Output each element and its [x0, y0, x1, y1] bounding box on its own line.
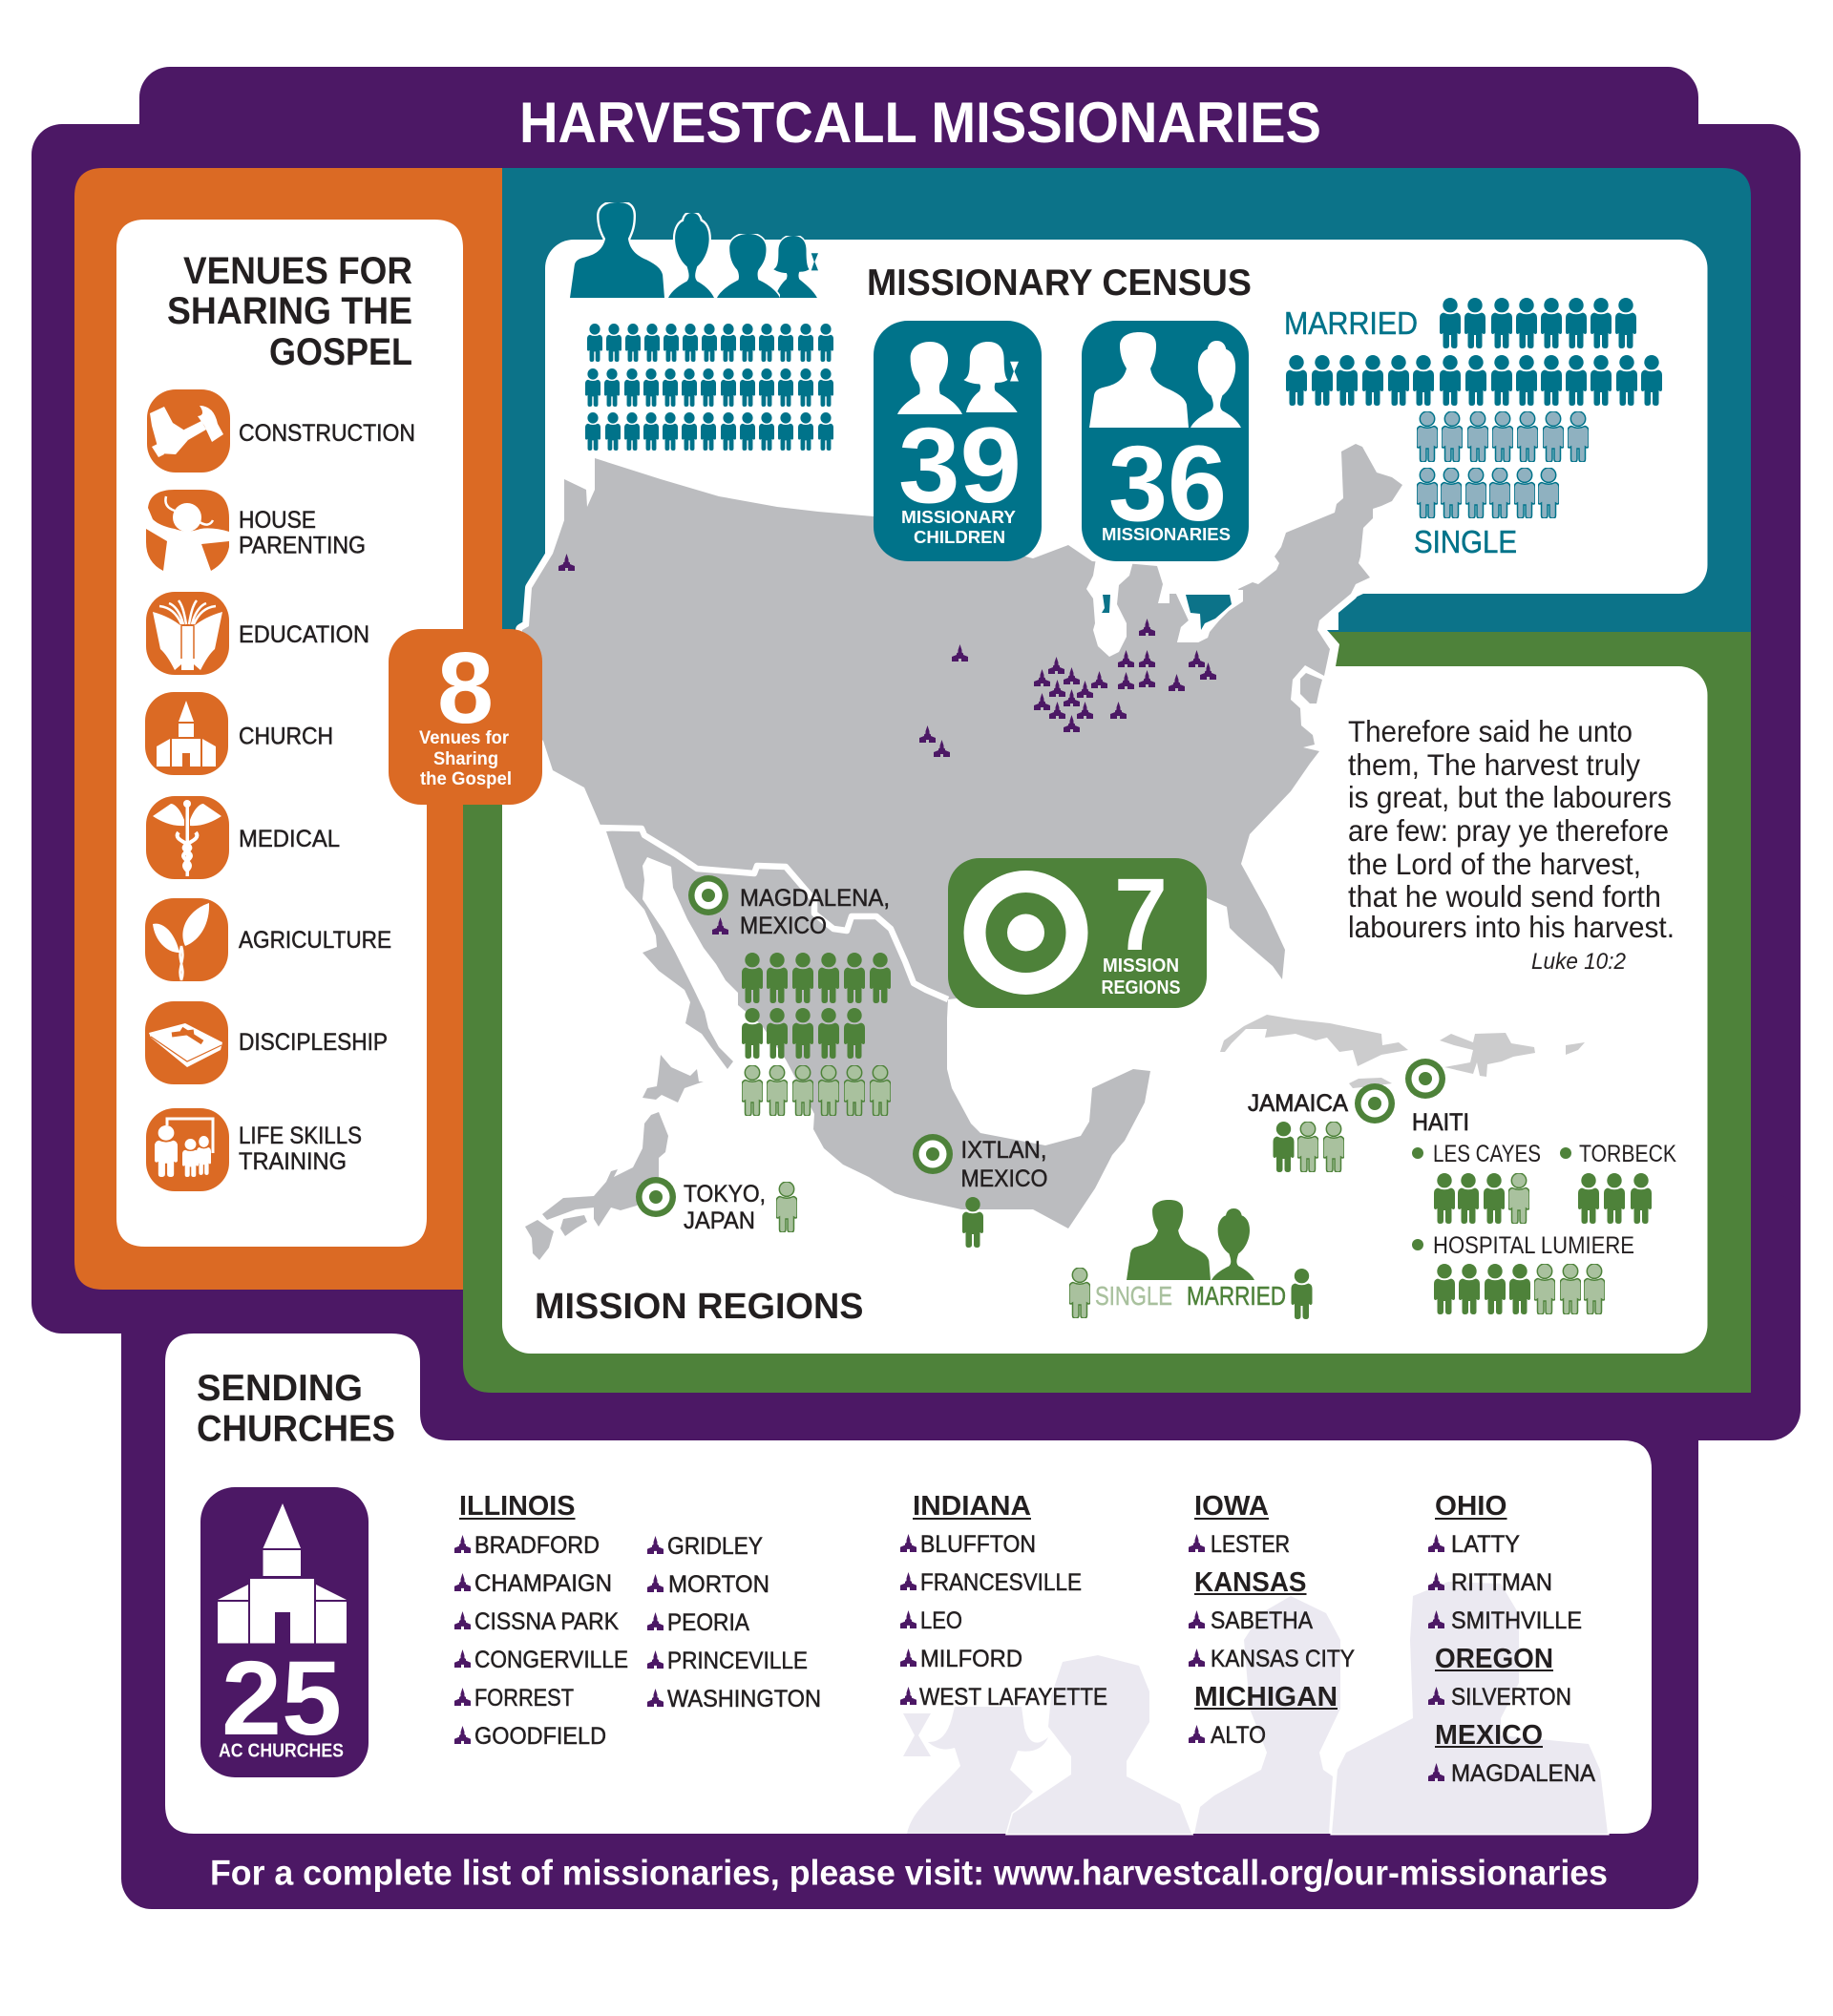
single people — [1417, 411, 1589, 518]
badge: 8 venues — [389, 629, 542, 805]
list: illinois: BRADFORD — [474, 1532, 600, 1559]
sending churches heading — [197, 1368, 395, 1449]
icon: construction — [147, 389, 230, 472]
list: illinois: GRIDLEY — [667, 1533, 763, 1560]
scripture quote: them, The harvest truly — [1348, 747, 1640, 782]
married label: MARRIED — [1284, 305, 1418, 341]
list: iowa kansas michigan: MICHIGAN — [1194, 1682, 1338, 1712]
panel: venues for sharing the gospel — [116, 220, 463, 1247]
list: illinois: FORREST — [474, 1685, 574, 1712]
list: iowa kansas michigan: KANSAS CITY — [1211, 1646, 1355, 1672]
region: ixtlan mexico: IXTLAN, — [960, 1137, 1046, 1164]
map: sending church markers — [558, 554, 1216, 757]
label: house parenting — [239, 507, 366, 559]
label: life skills training — [239, 1123, 362, 1175]
list: indiana: MILFORD — [920, 1646, 1022, 1672]
region: magdalena mexico: MEXICO — [740, 913, 827, 939]
map: lake huron shore — [1169, 590, 1243, 642]
list: iowa kansas michigan — [1189, 1491, 1355, 1749]
list: illinois: ILLINOIS — [459, 1491, 575, 1522]
region: jamaica — [1248, 1083, 1395, 1172]
scripture quote: Therefore said he unto — [1348, 714, 1633, 748]
list: ohio oregon mexico: LATTY — [1451, 1531, 1520, 1558]
badge: 8 venues: 8 — [437, 632, 494, 745]
list: illinois: WASHINGTON — [667, 1686, 821, 1712]
label: discipleship: DISCIPLESHIP — [239, 1029, 388, 1056]
badge: 8 venues: the Gospel — [420, 769, 512, 789]
census heading: MISSIONARY CENSUS — [867, 262, 1252, 304]
region: tokyo japan: JAPAN — [684, 1208, 755, 1234]
badge: 7 mission regions — [948, 856, 1207, 1008]
map: japan — [525, 1055, 704, 1260]
list: ohio oregon mexico: SILVERTON — [1451, 1684, 1571, 1711]
map: us mexico border — [597, 828, 948, 999]
badge: 36 missionaries — [1082, 321, 1249, 561]
title: HARVESTCALL MISSIONARIES — [519, 91, 1321, 155]
map: united states — [522, 444, 1402, 999]
list: indiana: INDIANA — [913, 1491, 1031, 1522]
map: lake sliver — [1102, 595, 1110, 613]
legend: single and married: MARRIED — [1187, 1281, 1286, 1311]
badge: 39 missionary children: MISSIONARY — [901, 508, 1016, 527]
region: ixtlan mexico — [913, 1134, 1048, 1248]
region: haiti — [1405, 1059, 1676, 1314]
map: lake huron — [1186, 595, 1232, 630]
label: agriculture: AGRICULTURE — [239, 927, 391, 954]
badge: 36 missionaries: MISSIONARIES — [1102, 525, 1231, 544]
region: haiti: HOSPITAL LUMIERE — [1433, 1232, 1634, 1259]
region: magdalena mexico — [688, 875, 891, 1116]
badge: 7 mission regions: 7 — [1114, 856, 1168, 972]
badge: 7 mission regions: MISSION — [1103, 956, 1179, 976]
scripture quote: is great, but the labourers — [1348, 780, 1672, 814]
list: illinois — [454, 1491, 821, 1750]
panel: missionary census — [570, 202, 1662, 561]
icon: house parenting — [146, 490, 229, 571]
people count: children — [585, 324, 833, 451]
badge: 25 ac churches: 25 — [221, 1640, 342, 1757]
mission regions heading: MISSION REGIONS — [535, 1287, 863, 1327]
badge: 36 missionaries: 36 — [1108, 424, 1227, 543]
list: illinois: PEORIA — [667, 1609, 749, 1636]
list: illinois: GOODFIELD — [474, 1723, 606, 1750]
map: caribbean islands — [1220, 1015, 1585, 1088]
label: medical: MEDICAL — [239, 826, 340, 852]
list: illinois: CONGERVILLE — [474, 1647, 628, 1673]
list: indiana: LEO — [920, 1607, 962, 1634]
list: iowa kansas michigan: LESTER — [1211, 1531, 1290, 1558]
map: mexico and baja california — [606, 829, 1150, 1228]
list: iowa kansas michigan: KANSAS — [1194, 1567, 1306, 1598]
icon: church — [145, 692, 228, 775]
badge: 25 ac churches — [200, 1487, 369, 1777]
scripture quote — [1348, 714, 1675, 975]
badge: 39 missionary children: CHILDREN — [914, 528, 1005, 547]
legend: single and married: SINGLE — [1095, 1281, 1172, 1311]
region: haiti: LES CAYES — [1433, 1141, 1541, 1167]
background silhouettes — [903, 1582, 1608, 1834]
label: education: EDUCATION — [239, 621, 369, 648]
region: tokyo japan — [636, 1177, 797, 1234]
list: indiana: WEST LAFAYETTE — [919, 1684, 1107, 1711]
list: iowa kansas michigan: SABETHA — [1211, 1607, 1313, 1634]
label: house parenting: HOUSE — [239, 507, 316, 534]
label: house parenting: PARENTING — [239, 533, 366, 559]
list: ohio oregon mexico: OREGON — [1435, 1644, 1553, 1674]
label: life skills training: LIFE SKILLS — [239, 1123, 362, 1149]
region: haiti: HAITI — [1412, 1109, 1469, 1136]
venues heading: GOSPEL — [269, 331, 412, 373]
panel backgrounds — [74, 168, 1751, 1393]
list: iowa kansas michigan: IOWA — [1194, 1491, 1269, 1522]
list: ohio oregon mexico: MAGDALENA — [1451, 1760, 1595, 1787]
scripture quote: the Lord of the harvest, — [1348, 847, 1641, 881]
icon: discipleship — [145, 1001, 228, 1084]
list: illinois: MORTON — [668, 1571, 769, 1598]
map: delmarva peninsula — [1300, 673, 1322, 704]
legend: single and married — [1069, 1200, 1312, 1319]
badge: 8 venues: Sharing — [433, 749, 498, 769]
sending churches heading: SENDING — [197, 1368, 363, 1409]
list: illinois: CHAMPAIGN — [474, 1570, 612, 1597]
icon: life skills training — [146, 1108, 229, 1191]
married people — [1286, 298, 1662, 406]
label: church: CHURCH — [239, 724, 333, 750]
list: ohio oregon mexico: MEXICO — [1435, 1720, 1543, 1751]
region: haiti: TORBECK — [1579, 1141, 1676, 1167]
list: illinois: PRINCEVILLE — [667, 1648, 808, 1674]
list: indiana: BLUFFTON — [920, 1531, 1036, 1558]
panel: sending churches — [165, 1334, 1652, 1834]
venues heading: VENUES FOR — [183, 250, 412, 292]
region: magdalena mexico: MAGDALENA, — [740, 885, 890, 912]
sending churches heading: CHURCHES — [197, 1409, 395, 1449]
family silhouettes — [570, 202, 818, 298]
scripture quote: Luke 10:2 — [1531, 949, 1626, 975]
list: ohio oregon mexico: RITTMAN — [1451, 1569, 1552, 1596]
region: tokyo japan: TOKYO, — [684, 1181, 766, 1208]
badge: 39 missionary children — [874, 321, 1042, 561]
list: indiana — [900, 1491, 1107, 1711]
list: indiana: FRANCESVILLE — [920, 1569, 1082, 1596]
list: ohio oregon mexico: OHIO — [1435, 1491, 1506, 1522]
single label: SINGLE — [1414, 524, 1517, 559]
list: illinois: CISSNA PARK — [474, 1608, 619, 1635]
icon: agriculture — [145, 898, 228, 981]
scripture quote: that he would send forth — [1348, 879, 1661, 914]
list: iowa kansas michigan: ALTO — [1211, 1722, 1266, 1749]
badge: 25 ac churches: AC CHURCHES — [219, 1741, 344, 1762]
scripture quote: are few: pray ye therefore — [1348, 813, 1669, 848]
icon: education — [146, 592, 229, 675]
venues heading — [167, 250, 412, 373]
list: ohio oregon mexico — [1428, 1491, 1595, 1787]
region: ixtlan mexico: MEXICO — [960, 1166, 1048, 1192]
footer call to action: For a complete list of missionaries, please visit: www.harvestcall.org/our-missionaries — [210, 1854, 1608, 1892]
map: north america and japan — [522, 444, 1585, 1260]
region: jamaica: JAMAICA — [1248, 1090, 1348, 1117]
list: ohio oregon mexico: SMITHVILLE — [1451, 1607, 1582, 1634]
badge: 8 venues: Venues for — [419, 728, 510, 748]
label: life skills training: TRAINING — [239, 1148, 347, 1175]
scripture quote: labourers into his harvest. — [1348, 910, 1675, 944]
badge: 7 mission regions: REGIONS — [1102, 977, 1180, 998]
venues heading: SHARING THE — [167, 290, 412, 332]
label: construction: CONSTRUCTION — [239, 420, 415, 447]
panel: mission regions — [535, 714, 1676, 1327]
badge: 39 missionary children: 39 — [898, 406, 1022, 525]
map: lake michigan — [1086, 558, 1133, 657]
icon: medical — [146, 796, 229, 879]
